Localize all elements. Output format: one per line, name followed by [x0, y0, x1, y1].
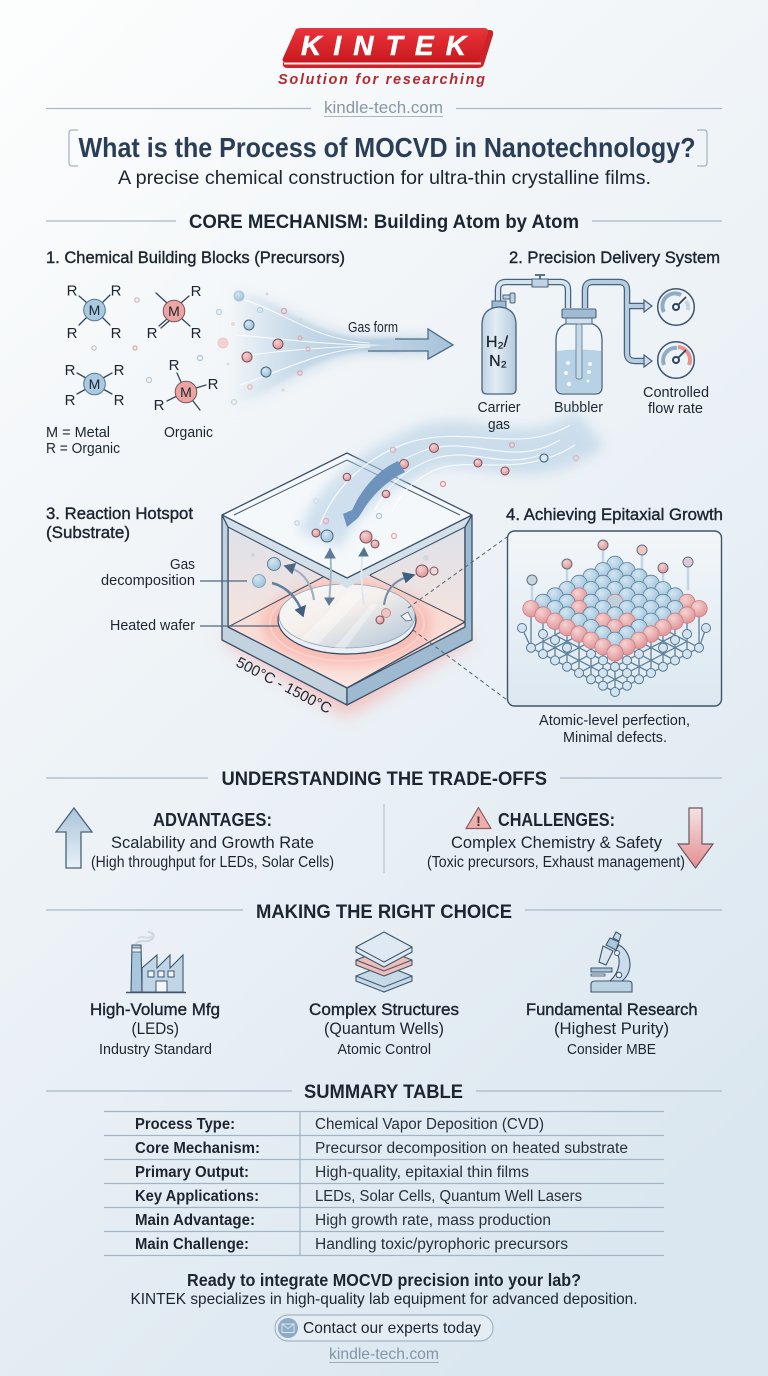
molecule 3 [65, 362, 125, 409]
decomposition particles and arrows [251, 529, 438, 624]
choice: fundamental research: Fundamental Research [526, 1000, 698, 1019]
molecule 2 [147, 283, 202, 342]
floating adatoms [527, 540, 693, 600]
reaction chamber [222, 453, 472, 716]
heading: core mechanism: CORE MECHANISM: Building Atom by Atom [189, 212, 579, 233]
molecule 4: M [180, 384, 192, 400]
choice: fundamental research: Consider MBE [567, 1041, 656, 1058]
molecule 2: R [147, 325, 158, 342]
molecule 1: R [111, 282, 122, 300]
label: bubbler: Bubbler [554, 399, 603, 416]
step 4 heading: 4. Achieving Epitaxial Growth [506, 505, 723, 524]
label: gas form: Gas form [348, 319, 398, 336]
label: carrier gas: Carrier [478, 399, 520, 416]
summary table: High growth rate, mass production [315, 1212, 551, 1229]
choice: fundamental research [526, 1000, 698, 1058]
summary table: Core Mechanism: [135, 1140, 260, 1157]
molecule 1: R [111, 325, 122, 342]
logo tagline: Solution for researching [278, 72, 485, 88]
website link bottom: kindle-tech.com [329, 1346, 439, 1363]
summary table: Primary Output: [135, 1164, 249, 1181]
step 2 heading: 2. Precision Delivery System [509, 248, 720, 267]
heading: summary table: SUMMARY TABLE [304, 1082, 463, 1103]
choice: complex structures: Atomic Control [338, 1041, 431, 1058]
heading: trade-offs: UNDERSTANDING THE TRADE-OFFS [222, 769, 547, 790]
temperature label: 500°C - 1500°C [233, 654, 334, 718]
advantages text: ADVANTAGES: [153, 809, 272, 830]
icon: carrier gas cylinder: H₂/ [486, 334, 509, 351]
molecule 4: R [169, 357, 180, 374]
icon: layered wafers [356, 932, 412, 992]
base faces [222, 515, 472, 705]
choice: complex structures: (Quantum Wells) [324, 1019, 444, 1038]
choice: complex structures [309, 1000, 459, 1058]
contact button: Contact our experts today [303, 1320, 481, 1337]
wafer [270, 584, 424, 661]
subtitle: A precise chemical construction for ultra-thin crystalline films. [118, 167, 651, 189]
choice: high-volume: High-Volume Mfg [90, 1000, 220, 1019]
panel: epitaxial growth lattice [508, 531, 722, 706]
step 3 heading: (Substrate) [46, 523, 130, 542]
molecule 4: R [208, 376, 219, 393]
chamber walls and floor [222, 453, 472, 705]
molecule 3: R [114, 362, 125, 379]
summary table: Chemical Vapor Deposition (CVD) [315, 1116, 544, 1133]
icon: microscope [591, 932, 632, 992]
summary table: Handling toxic/pyrophoric precursors [315, 1236, 568, 1253]
icon: carrier gas cylinder [482, 293, 516, 394]
zoom callout dashed lines [408, 537, 507, 700]
label: controlled flow rate: Controlled [643, 384, 709, 401]
call to action heading: Ready to integrate MOCVD precision into your lab? [187, 1270, 581, 1290]
molecule 4 [154, 357, 219, 414]
icon: warning triangle [466, 808, 491, 829]
choice: fundamental research: (Highest Purity) [554, 1019, 669, 1038]
icon: bubbler [556, 309, 602, 394]
summary table: High-quality, epitaxial thin films [315, 1164, 529, 1181]
lattice caption: Minimal defects. [563, 729, 667, 746]
summary table: Main Advantage: [135, 1212, 255, 1229]
molecule 3: R [114, 392, 125, 409]
advantages text [91, 809, 334, 871]
choice: complex structures: Complex Structures [309, 1000, 459, 1019]
label: gas decomposition: Gas [170, 556, 195, 573]
label: gas decomposition [101, 556, 247, 589]
icon: envelope [278, 1318, 298, 1338]
icon: warning triangle: ! [476, 813, 481, 829]
lattice caption [539, 712, 690, 746]
challenges text: Complex Chemistry & Safety [451, 833, 662, 852]
choice: high-volume: (LEDs) [132, 1019, 179, 1038]
molecule 1 [67, 282, 122, 342]
molecule 4: R [154, 397, 165, 414]
molecule 2: M [168, 303, 180, 319]
glass roof and rim [222, 453, 472, 588]
gas stream [92, 280, 430, 415]
website link top: kindle-tech.com [324, 99, 443, 117]
swirling gas inflow [295, 425, 590, 540]
logo: KINTEK [278, 28, 493, 88]
heading: right choice: MAKING THE RIGHT CHOICE [256, 902, 512, 923]
label: carrier gas [478, 399, 520, 433]
contact button [275, 1315, 493, 1341]
advantages text: Scalability and Growth Rate [111, 833, 314, 852]
summary table: Key Applications: [135, 1188, 259, 1205]
step 1 heading: 1. Chemical Building Blocks (Precursors) [46, 248, 345, 267]
challenges text [427, 809, 685, 871]
label: carrier gas: gas [488, 416, 510, 433]
substrate lattice [518, 603, 710, 696]
step 3 heading [46, 504, 193, 542]
logo: KINTEK: KINTEK [301, 30, 468, 61]
icon: carrier gas cylinder: N₂ [489, 353, 507, 370]
summary table: Process Type: [135, 1116, 235, 1133]
divider [383, 804, 385, 873]
molecule 1: R [67, 325, 78, 342]
label: controlled flow rate [643, 384, 709, 417]
label: heated wafer: Heated wafer [110, 617, 195, 634]
arrow: gas form [362, 329, 453, 359]
molecule 1: R [67, 282, 78, 300]
label: controlled flow rate: flow rate [648, 400, 703, 417]
molecule 3: R [65, 362, 76, 379]
challenges text: (Toxic precursors, Exhaust management) [427, 854, 685, 871]
molecule 3: R [65, 392, 76, 409]
summary table [104, 1112, 664, 1256]
legend: M and R [46, 424, 120, 457]
molecule 2: R [191, 325, 202, 342]
icon: down arrow [678, 808, 713, 868]
label: organic: Organic [164, 424, 213, 441]
choice: high-volume [90, 1000, 220, 1058]
icon: factory [126, 932, 186, 992]
summary table: LEDs, Solar Cells, Quantum Well Lasers [315, 1188, 582, 1205]
crystal surface atoms [523, 556, 707, 661]
arrow: gas flow into chamber [343, 461, 405, 527]
icon: flow gauge top [658, 289, 694, 325]
molecule 1: M [89, 302, 100, 318]
icon: flow gauge bottom [658, 342, 694, 378]
molecule 3: M [89, 376, 100, 392]
delivery system pipes [498, 275, 652, 367]
choice: high-volume: Industry Standard [99, 1041, 212, 1058]
label: gas decomposition: decomposition [101, 572, 195, 589]
icon: up arrow [56, 808, 92, 868]
title: What is the Process of MOCVD in Nanotechnology? [78, 132, 696, 163]
challenges text: CHALLENGES: [498, 809, 615, 830]
lattice caption: Atomic-level perfection, [539, 712, 690, 729]
legend: M and R: R = Organic [46, 440, 120, 457]
legend: M and R: M = Metal [46, 424, 110, 441]
advantages text: (High throughput for LEDs, Solar Cells) [91, 854, 334, 871]
molecule 2: R [191, 283, 202, 300]
summary table: Precursor decomposition on heated substrate [315, 1140, 628, 1157]
step 3 heading: 3. Reaction Hotspot [46, 504, 193, 523]
summary table: Main Challenge: [135, 1236, 249, 1253]
call to action text: KINTEK specializes in high-quality lab equipment for advanced deposition. [130, 1291, 638, 1308]
